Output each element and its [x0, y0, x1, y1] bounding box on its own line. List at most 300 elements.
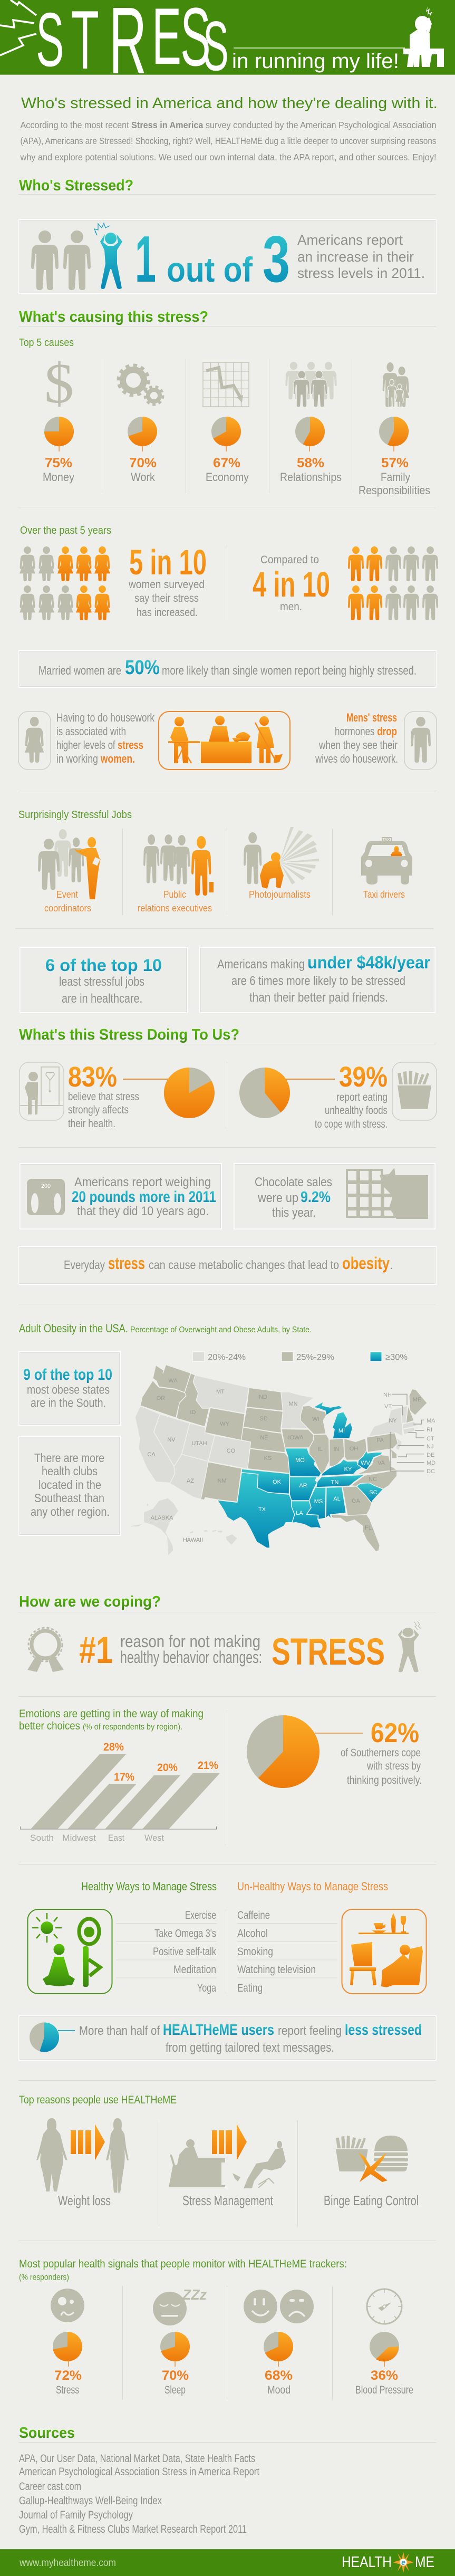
text: 9.2%: [301, 1189, 331, 1206]
state labels: TN: [331, 1479, 338, 1486]
values: 28%: [103, 1741, 124, 1753]
state labels: MS: [314, 1498, 323, 1505]
pictogram: men 4 in 10: [348, 546, 438, 620]
signal: stress: [51, 2289, 84, 2396]
label: Stress: [56, 2384, 79, 2396]
panel: 6 of the top 10: [20, 947, 187, 1013]
icon: man in rounded box: [404, 712, 437, 770]
text: housework men: when they see their: [318, 738, 398, 752]
text: housework men: wives do housework.: [315, 752, 398, 765]
value: 36%: [371, 2368, 398, 2383]
icon: sleeping face: ZZz: [182, 2286, 207, 2303]
callout labels: CT: [427, 1436, 434, 1442]
state labels: NC: [369, 1476, 377, 1483]
state labels: KS: [264, 1455, 272, 1462]
header banner: [0, 0, 455, 93]
icon: stressed man on bench: [403, 6, 444, 67]
text: were up: [257, 1191, 298, 1205]
callout labels: MA: [427, 1418, 435, 1424]
heading: unhealthy ways: Un-Healthy Ways to Manage Stress: [237, 1880, 388, 1893]
text: housework women: [56, 711, 155, 765]
label: Relationships: [280, 470, 342, 484]
cause: work: [119, 366, 163, 484]
stat: 62%: with stress by: [366, 1760, 421, 1772]
list: healthy ways: Positive self-talk: [153, 1946, 216, 1958]
callout labels: NJ: [427, 1444, 433, 1450]
values: 17%: [114, 1771, 134, 1783]
callout lines: [390, 1394, 424, 1471]
label: Taxi drivers: [363, 889, 405, 900]
panel: 9 of the top 10: most obese states: [27, 1383, 110, 1397]
pie: 72%: [53, 2332, 82, 2367]
callout: #1 reason: [79, 1630, 385, 1673]
text: that they did 10 years ago.: [77, 1204, 209, 1218]
text: 20 pounds more in 2011: [72, 1188, 216, 1206]
pie: 83%: [123, 1068, 215, 1118]
panel: under $48k: [200, 947, 435, 1013]
pie: more than half: [30, 2022, 75, 2052]
list: healthy ways: [116, 1909, 217, 1994]
subheading: emotions: [19, 1708, 204, 1732]
text: less stressed: [345, 2022, 422, 2039]
bar chart: emotions by region: [20, 1741, 220, 1843]
text: Americans report weighing: [74, 1175, 211, 1189]
value: 70%: [162, 2368, 189, 2383]
panel: married women: [19, 650, 436, 687]
stat: 4 in 10 men: men.: [280, 601, 302, 613]
job: photojournalists: [244, 827, 319, 900]
callout: #1 reason: #1: [79, 1630, 113, 1671]
text: housework women: is associated with: [56, 725, 126, 738]
icon: housework box: [159, 712, 290, 770]
text: Chocolate sales: [255, 1175, 332, 1189]
list: healthy ways: Meditation: [173, 1964, 216, 1976]
stat: 5 in 10 women: has increased.: [137, 607, 198, 619]
icon: executives: [143, 834, 214, 896]
panel: everyday stress: Everyday: [64, 1258, 105, 1272]
subheading: health signals: (% responders): [19, 2273, 69, 2282]
icon: smile and frown faces: [244, 2290, 314, 2323]
logo: HEALTHeME: [342, 2552, 434, 2573]
stat: 4 in 10 men: [253, 554, 330, 613]
state labels: ME: [413, 1397, 421, 1403]
panel: everyday stress: [19, 1246, 436, 1284]
text: report feeling: [278, 2024, 342, 2038]
subheading: top reasons: Top reasons people use HEALTHeME: [19, 2094, 177, 2106]
icon: before and after silhouettes: [36, 2118, 129, 2193]
state labels: AR: [299, 1483, 307, 1489]
panel: chocolate: [234, 1164, 435, 1229]
pie: 70%: [128, 417, 157, 451]
label: Blood Pressure: [355, 2384, 413, 2396]
text: this year.: [272, 1206, 316, 1220]
value: 58%: [297, 456, 324, 470]
value: 68%: [265, 2368, 293, 2383]
state labels: LA: [296, 1510, 303, 1516]
heading: What's causing this stress?: What's causing this stress?: [19, 309, 208, 325]
label: [138, 889, 212, 914]
value: 67%: [213, 456, 240, 470]
stat: 4 in 10 men: Compared to: [260, 554, 319, 566]
state labels: IN: [333, 1446, 340, 1453]
pie: 62%: [247, 1715, 363, 1788]
state labels: NV: [167, 1437, 176, 1443]
job: taxi drivers: [361, 837, 412, 900]
panel: everyday stress: obesity: [342, 1254, 390, 1273]
label: Public: [163, 889, 186, 900]
text: [255, 1175, 332, 1220]
stat: 5 in 10 women: say their stress: [134, 592, 199, 604]
panel: health clubs: any other region.: [31, 1505, 110, 1518]
callout: #1 reason: reason for not making: [120, 1632, 260, 1651]
icon: person at doctor's door: [20, 1062, 64, 1120]
state labels: PA: [376, 1437, 384, 1444]
icon: falling chart: [203, 362, 249, 407]
state labels: SD: [259, 1416, 268, 1422]
state labels: ALASKA: [151, 1515, 173, 1521]
text: housework women: Having to do housework: [56, 711, 155, 724]
pie: 67%: [211, 417, 241, 451]
icon: chocolate bar: [347, 1168, 428, 1219]
sources list: APA, Our User Data, National Market Data, State Health Facts: [19, 2453, 255, 2465]
reason: weight loss: [36, 2118, 129, 2208]
label: coordinators: [44, 903, 91, 914]
stat: 39%: to cope with stress.: [315, 1118, 388, 1130]
job: event coordinators: [38, 829, 100, 914]
stat: 62%: of Southerners cope: [341, 1747, 421, 1759]
callout labels: RI: [427, 1427, 432, 1433]
icon: stressed person: [94, 223, 122, 289]
state labels: TX: [258, 1506, 266, 1513]
intro paragraph: why and explore potential solutions. We used our own internal data, the APA report, and other sources. Enjoy!: [20, 152, 437, 162]
text: [72, 1175, 216, 1218]
statistic caption: Americans report: [297, 232, 403, 248]
list: unhealthy ways: Eating: [237, 1982, 263, 1994]
icon: fries in rounded box: [392, 1062, 437, 1120]
values: 21%: [198, 1760, 218, 1772]
text: housework women: higher levels of stress: [56, 738, 143, 752]
value: 57%: [381, 456, 409, 470]
signal: blood pressure: [355, 2289, 413, 2396]
state labels: SC: [369, 1489, 377, 1496]
subheading: emotions: better choices: [19, 1720, 80, 1732]
region labels: Midwest: [62, 1833, 96, 1843]
subheading: emotions: Emotions are getting in the way of making: [19, 1708, 204, 1720]
heading: Sources: Sources: [19, 2425, 75, 2442]
panel: HEALTHeME users: [19, 2016, 436, 2060]
subheading: health signals: [19, 2258, 347, 2282]
label: [359, 470, 430, 497]
state labels: GA: [352, 1498, 361, 1504]
icon: award ribbon: [27, 1628, 64, 1672]
bars: [31, 1754, 220, 1829]
panel: health clubs: [19, 1436, 120, 1535]
intro heading: Who's stressed in America and how they're dealing with it.: [21, 95, 438, 112]
map legend: [192, 1352, 408, 1362]
sources list: Journal of Family Psychology: [19, 2509, 133, 2521]
statistic: 1: [135, 223, 156, 296]
panel: 1 out of 3: [19, 219, 436, 296]
icon: scale: [27, 1179, 65, 1215]
panel: 20 pounds: [20, 1164, 221, 1229]
stat: 39%: [315, 1061, 388, 1130]
region labels: West: [144, 1833, 164, 1843]
state labels: WA: [168, 1378, 178, 1384]
panel: 9 of the top 10: 9 of the top 10: [23, 1366, 112, 1383]
text: housework men: Mens' stress: [346, 711, 397, 724]
subheading: over the past 5 years: Over the past 5 years: [20, 525, 111, 536]
state labels: MN: [288, 1401, 298, 1407]
callout labels: VT: [384, 1404, 392, 1410]
label: Work: [131, 470, 156, 484]
reason: stress management: [169, 2124, 286, 2208]
subheading: adult obesity: Percentage of Overweight and Obese Adults, by State.: [130, 1325, 312, 1334]
state labels: [147, 1378, 421, 1543]
panel: married women: 50%: [125, 657, 160, 679]
panel: health clubs: Southeast than: [34, 1491, 104, 1505]
heading: What's this Stress Doing To Us?: What's this Stress Doing To Us?: [19, 1026, 239, 1043]
list: healthy ways: Exercise: [185, 1909, 216, 1921]
subheading: health signals: Most popular health signals that people monitor with HEALTHeME trackers:: [19, 2258, 347, 2270]
callout labels: DC: [427, 1468, 435, 1475]
stat: 5 in 10 women: [128, 543, 207, 619]
axis: [20, 1827, 216, 1829]
label: Event: [56, 889, 78, 900]
label: [44, 889, 91, 914]
statistic: 3: [263, 223, 290, 296]
stat: 83%: believe that stress: [68, 1091, 139, 1103]
stat: 39%: report eating: [336, 1091, 388, 1103]
icon: desk to relaxed: [169, 2124, 286, 2188]
subheading: adult obesity: [19, 1322, 312, 1335]
label: Weight loss: [58, 2193, 111, 2208]
state labels: IOWA: [288, 1435, 304, 1441]
panel: everyday stress: stress: [108, 1254, 145, 1273]
label: Photojournalists: [249, 889, 311, 900]
state labels: MO: [295, 1457, 305, 1464]
state labels: HAWAII: [183, 1537, 203, 1543]
icon: scale: 200: [41, 1183, 51, 1189]
icon: event people: [38, 829, 100, 899]
cause: relationships: [280, 362, 342, 484]
icon: two calm people: [31, 230, 91, 290]
panel: health clubs: located in the: [38, 1478, 101, 1492]
label: Economy: [206, 470, 249, 484]
heading: healthy ways: Healthy Ways to Manage Stress: [81, 1880, 217, 1893]
icon: photographers and burst: [244, 827, 319, 889]
callout labels: [383, 1392, 435, 1475]
icon: worried face: [51, 2289, 84, 2322]
state labels: OR: [157, 1395, 165, 1401]
stat: 83%: their health.: [68, 1118, 115, 1130]
stat: 62%: 62%: [371, 1718, 419, 1748]
text: HEALTHeME users: [163, 2022, 274, 2039]
stat: 83%: [68, 1061, 139, 1130]
state labels: WY: [220, 1421, 230, 1427]
label: Sleep: [164, 2384, 186, 2396]
stat: 39%: 39%: [339, 1061, 388, 1093]
value: 72%: [54, 2368, 82, 2383]
map legend: ≥30%: [385, 1352, 408, 1362]
state labels: CA: [147, 1452, 156, 1458]
stat: 83%: 83%: [68, 1061, 117, 1093]
title: STRESS: S: [203, 7, 229, 85]
callout: #1 reason: STRESS: [272, 1631, 385, 1673]
text: More than half of: [79, 2024, 160, 2038]
icon: fries burger and X: [336, 2136, 408, 2182]
state labels: NY: [389, 1418, 397, 1424]
state labels: NM: [217, 1478, 227, 1484]
values: [103, 1741, 218, 1783]
subheading: adult obesity: Adult Obesity in the USA.: [19, 1322, 128, 1335]
state labels: ND: [259, 1394, 267, 1400]
subheading: emotions: (% of respondents by region).: [83, 1723, 182, 1732]
panel: married women: Married women are: [38, 664, 121, 677]
stat: 5 in 10 women: 5 in 10: [129, 543, 207, 582]
subheading: surprisingly stressful jobs: Surprisingly Stressful Jobs: [18, 809, 132, 821]
statistic: [135, 223, 290, 296]
statistic caption: an increase in their: [297, 249, 414, 265]
icon: woman in rounded box: [18, 712, 51, 770]
statistic caption: stress levels in 2011.: [297, 265, 425, 281]
label: Stress Management: [182, 2193, 274, 2208]
panel: 9 of the top 10: [19, 1352, 120, 1425]
panel: 6 of the top 10: least stressful jobs: [59, 975, 144, 989]
sources list: Gallup-Healthways Well-Being Index: [19, 2495, 162, 2507]
statistic caption: [297, 232, 425, 281]
values: 20%: [157, 1762, 178, 1774]
label: Responsibilities: [359, 484, 430, 497]
text: housework men: [315, 711, 398, 765]
icon: group of people: [285, 362, 337, 407]
panel: everyday stress: can cause metabolic changes that lead to: [149, 1258, 339, 1272]
pie: 36%: [370, 2332, 399, 2367]
icon: lightning bolts: [0, 0, 36, 55]
panel: 6 of the top 10: 6 of the top 10: [45, 956, 162, 975]
state labels: KY: [344, 1466, 352, 1473]
state labels: WV: [361, 1460, 371, 1466]
list: healthy ways: Yoga: [197, 1982, 216, 1994]
state labels: CO: [227, 1448, 236, 1454]
list: unhealthy ways: Alcohol: [237, 1927, 268, 1940]
stat: 62%: [341, 1718, 422, 1786]
panel: health clubs: health clubs: [42, 1464, 98, 1478]
heading: How are we coping?: How are we coping?: [19, 1593, 161, 1610]
text: [79, 2022, 422, 2055]
panel: under $48k: than their better paid friends.: [249, 991, 388, 1005]
stat: 4 in 10 men: 4 in 10: [253, 565, 330, 604]
pie: 39%: [239, 1068, 335, 1118]
icon: pressure gauge: [367, 2289, 402, 2324]
map legend: 25%-29%: [296, 1352, 334, 1362]
footer: [0, 2549, 455, 2576]
state labels: ID: [190, 1409, 196, 1416]
pie: 75%: [44, 417, 74, 451]
text: from getting tailored text messages.: [166, 2041, 334, 2055]
sources list: Career cast.com: [19, 2481, 81, 2493]
state labels: MI: [338, 1428, 345, 1434]
callout: #1 reason: healthy behavior changes:: [120, 1648, 262, 1667]
state labels: MT: [216, 1389, 225, 1395]
icon: dollar sign: $: [44, 352, 74, 415]
icon: sleeping face: [153, 2286, 207, 2325]
icon: taxi: TAXI: [382, 837, 391, 842]
panel: under $48k: are 6 times more likely to be stressed: [231, 974, 405, 988]
panel: everyday stress: .: [390, 1258, 393, 1272]
stat: 39%: unhealthy foods: [325, 1104, 388, 1117]
map legend: 20%-24%: [208, 1352, 246, 1362]
sources list: American Psychological Association Stress in America Report: [19, 2466, 259, 2478]
value: 75%: [45, 456, 72, 470]
state labels: FL.: [365, 1525, 373, 1531]
panel: under $48k: Americans making: [217, 957, 305, 972]
value: 70%: [129, 456, 157, 470]
subtitle: in running my life!: [232, 50, 399, 73]
subheading: top 5 causes: Top 5 causes: [19, 337, 74, 349]
icon: unhealthy habits box: [342, 1909, 426, 1994]
list: unhealthy ways: Watching television: [237, 1964, 316, 1976]
panel: 9 of the top 10: are in the South.: [31, 1396, 106, 1409]
state labels: WI: [312, 1416, 320, 1422]
state labels: OH: [350, 1446, 358, 1452]
intro paragraph: According to the most recent Stress in America survey conducted by the American Psychological Association: [20, 120, 437, 130]
label: Binge Eating Control: [324, 2193, 419, 2208]
stat: 83%: strongly affects: [68, 1104, 129, 1116]
label: Mood: [267, 2384, 291, 2396]
signal: mood: [244, 2290, 314, 2396]
panel: health clubs: There are more: [34, 1451, 104, 1465]
label: Family: [381, 470, 410, 484]
region labels: [30, 1833, 164, 1843]
region labels: South: [30, 1833, 54, 1843]
callout labels: NH: [383, 1392, 392, 1398]
logo: HEALTHeME: e: [401, 2558, 405, 2567]
footer url: www.myhealtheme.com: [19, 2558, 116, 2569]
callout labels: MD: [427, 1460, 435, 1466]
list: unhealthy ways: [237, 1909, 337, 1994]
cause: economy: [203, 362, 249, 484]
list: unhealthy ways: Caffeine: [237, 1909, 270, 1921]
panel: under $48k: under $48k/year: [307, 953, 430, 972]
label: Money: [43, 470, 74, 484]
icon: gears: [119, 366, 163, 405]
state labels: OK: [273, 1479, 282, 1485]
list: unhealthy ways: Smoking: [237, 1946, 273, 1958]
pie: 68%: [264, 2332, 293, 2367]
pie: 57%: [379, 417, 409, 451]
cause: money: [43, 352, 74, 484]
sources list: [19, 2453, 259, 2535]
stat: 5 in 10 women: women surveyed: [128, 579, 205, 591]
icon: stressed person gray: [398, 1621, 421, 1673]
region labels: East: [108, 1833, 124, 1843]
job: public relations executives: [138, 834, 214, 914]
state labels: IL: [317, 1446, 323, 1453]
state labels: AZ: [187, 1478, 194, 1484]
statistic: out of: [167, 250, 253, 289]
signal: sleep: [153, 2286, 207, 2396]
reason: binge eating control: [324, 2136, 419, 2208]
state labels: VA: [377, 1460, 385, 1466]
callout labels: DE: [427, 1452, 434, 1458]
stat: 62%: thinking positively.: [347, 1774, 422, 1786]
state labels: UTAH: [191, 1440, 207, 1447]
logo: HEALTHeME: ME: [415, 2554, 434, 2571]
text: housework women: in working women.: [56, 752, 135, 765]
choropleth map of the USA: [130, 1364, 435, 1556]
panel: 6 of the top 10: are in healthcare.: [62, 992, 142, 1006]
pictogram: women 5 in 10: [20, 546, 110, 620]
